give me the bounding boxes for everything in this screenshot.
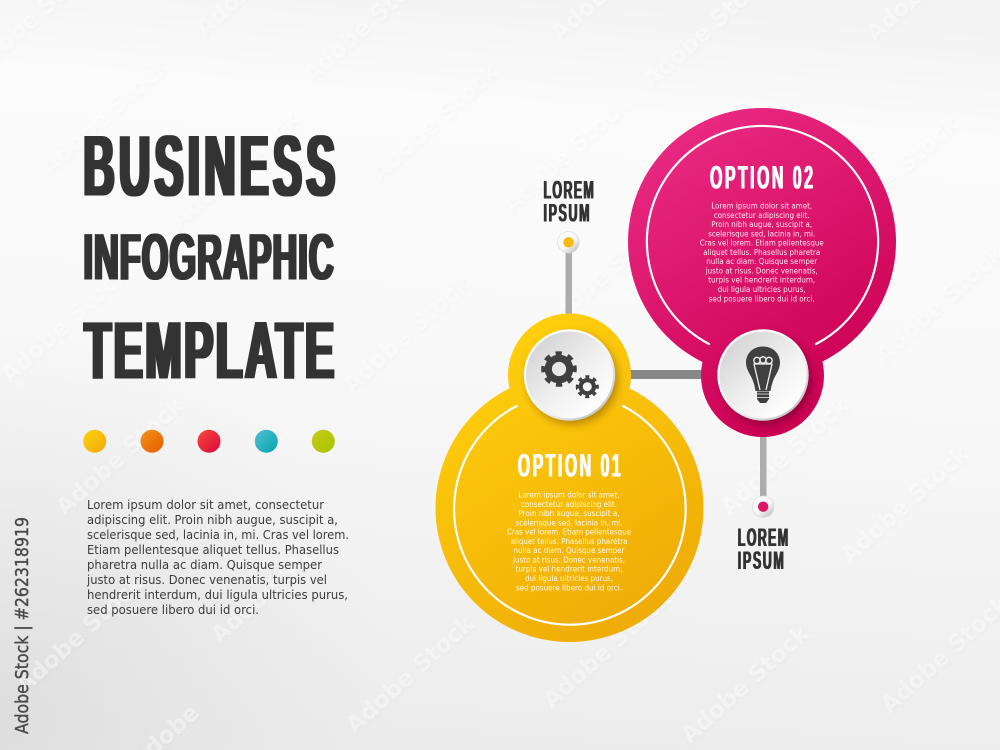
label: top lorem ipsum [544,177,594,228]
watermarks: Adobe Stock [338,270,477,399]
colour dots [83,430,335,453]
option 01 text: turpis vel hendrerit interdum, [516,565,622,574]
label: bottom lorem ipsum: LOREM [738,524,788,552]
label: bottom lorem ipsum [738,524,788,575]
watermarks: Adobe Stock [36,52,175,181]
body text: pharetra nulla ac diam. Quisque semper [87,557,323,572]
option 01 text: aliquet tellus. Phasellus pharetra [510,537,628,546]
body text: Etiam pellentesque aliquet tellus. Phasellus [87,542,339,557]
watermarks: Adobe Stock [11,570,150,699]
watermarks: Adobe Stock [498,90,637,219]
title [84,118,335,396]
option 01 text: nulla ac diam. Quisque semper [514,546,625,555]
option 02 text: justo at risus. Donec venenatis, [705,266,818,275]
yellow badge shape [436,314,704,642]
yellow ring [454,406,686,625]
icon disc: gears [524,329,615,421]
watermarks: Adobe Stock [51,392,190,521]
body text: justo at risus. Donec venenatis, turpis vel [86,572,327,587]
option 02 text: scelerisque sed, lacinia in, mi. [708,229,815,238]
icon disc: bulb [717,329,809,421]
body text: scelerisque sed, lacinia in, mi. Cras vel lorem. [87,527,349,542]
watermarks: Adobe Stock [836,440,975,569]
pink ring [647,126,878,344]
option 01 text [507,491,631,592]
dot: green [312,430,335,453]
panel: option 02 [628,108,896,437]
watermarks: Adobe Stock [341,610,480,739]
option 02 text: aliquet tellus. Phasellus pharetra [703,248,820,257]
icon: light bulb [746,346,780,403]
icon: gears [540,350,599,398]
option 02 text: Lorem ipsum dolor sit amet, [711,202,812,211]
option 01 text: sed posuere libero dui id orci. [516,583,622,592]
connector: horizontal [628,370,704,379]
label: top lorem ipsum: LOREM [544,177,594,205]
option 01 heading: OPTION 01 [518,449,621,484]
option 02 text: Proin nibh augue, suscipit a, [711,220,812,229]
stock id label: Adobe Stock | #262318919 [12,517,33,734]
connector: top vertical [566,250,572,316]
node: top [558,232,579,253]
connector: bottom vertical [760,434,766,500]
pink badge shape [628,108,896,437]
option 01 text: Cras vel lorem. Etiam pellentesque [507,528,631,537]
dot: orange [140,430,164,453]
watermarks: Adobe Stock [538,585,677,714]
watermarks: Adobe Stock [206,520,345,649]
option 01 text: Lorem ipsum dolor sit amet, [518,491,620,500]
title line: business: BUSINESS [84,118,335,214]
label: bottom lorem ipsum: IPSUM [738,547,784,575]
watermarks: Adobe Stock [826,110,965,239]
watermarks: Adobe Stock [0,260,135,389]
watermarks: Adobe Stock [676,620,815,749]
option 01 text: Proin nibh augue, suscipit a, [518,509,620,518]
option 01 text: justo at risus. Donec venenatis, [512,555,625,564]
label: top lorem ipsum: IPSUM [544,200,589,228]
option 02 text: sed posuere libero dui id orci. [709,294,815,303]
body text: adipiscing elit. Proin nibh augue, suscipit a, [87,512,338,527]
watermarks: Adobe Stock [536,210,675,339]
body text: Lorem ipsum dolor sit amet, consectetur [87,497,325,512]
option 01 text: consectetur adipiscing elit. [521,500,617,509]
option 02 text: consectetur adipiscing elit. [714,211,810,220]
body text: sed posuere libero dui id orci. [87,602,259,617]
panel: option 01 [436,314,704,642]
watermarks: Adobe Stock [166,105,305,234]
option 01 text: dui ligula ultricies purus, [525,574,613,583]
title line: infographic: INFOGRAPHIC [84,220,334,294]
dot: yellow [83,430,106,453]
option 02 text: dui ligula ultricies purus, [718,285,806,294]
node: bottom [752,496,774,518]
watermarks: Adobe Stock [366,58,505,187]
option 02 heading: OPTION 02 [710,161,813,196]
dot: red [198,430,220,453]
watermarks: Adobe Stock [716,392,855,521]
option 02 text [700,202,824,303]
title line: template: TEMPLATE [84,305,334,396]
option 02 text: turpis vel hendrerit interdum, [708,276,815,285]
body text [86,497,349,617]
dot: teal [255,430,278,453]
body text: hendrerit interdum, dui ligula ultricies purus, [87,587,348,602]
option 02 text: nulla ac diam. Quisque semper [706,257,818,266]
option 02 text: Cras vel lorem. Etiam pellentesque [700,239,824,248]
option 01 text: scelerisque sed, lacinia in, mi. [516,518,622,527]
